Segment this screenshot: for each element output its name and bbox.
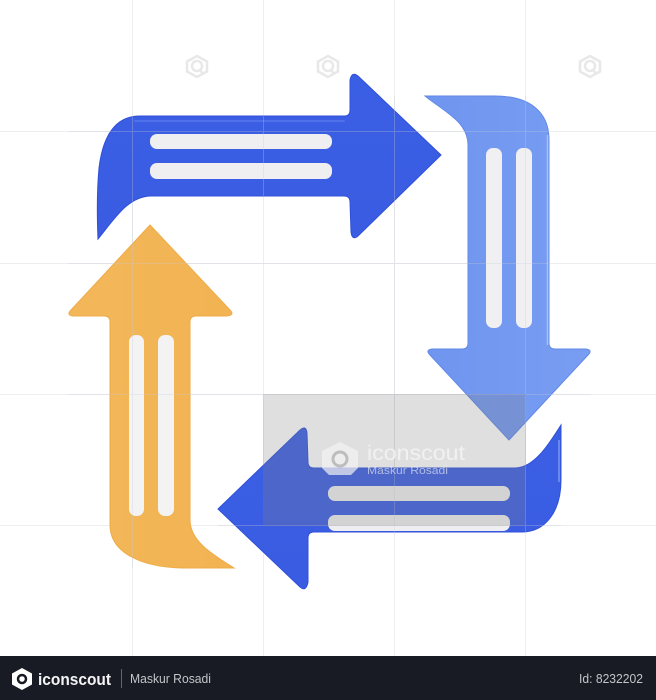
footer logo — [12, 668, 32, 690]
watermark icons: top row — [187, 56, 600, 77]
text lines — [129, 335, 174, 516]
watermark panel: Maskur Rosadi — [367, 465, 448, 477]
footer id: Id: 8232202 — [579, 672, 643, 686]
text lines — [328, 486, 510, 531]
text lines — [150, 134, 332, 179]
footer author: Maskur Rosadi — [130, 672, 211, 686]
watermark panel — [263, 394, 526, 526]
watermark text: iconscout — [367, 442, 465, 465]
footer brand: iconscout — [38, 670, 111, 689]
watermark logo — [322, 442, 358, 475]
footer bar — [0, 656, 656, 700]
text lines — [486, 148, 532, 328]
arrow: top blue pointing right — [97, 74, 441, 239]
arrow: bottom blue pointing left — [218, 425, 561, 589]
arrow: left orange pointing up — [69, 225, 234, 568]
arrow: right light blue pointing down — [425, 96, 590, 440]
